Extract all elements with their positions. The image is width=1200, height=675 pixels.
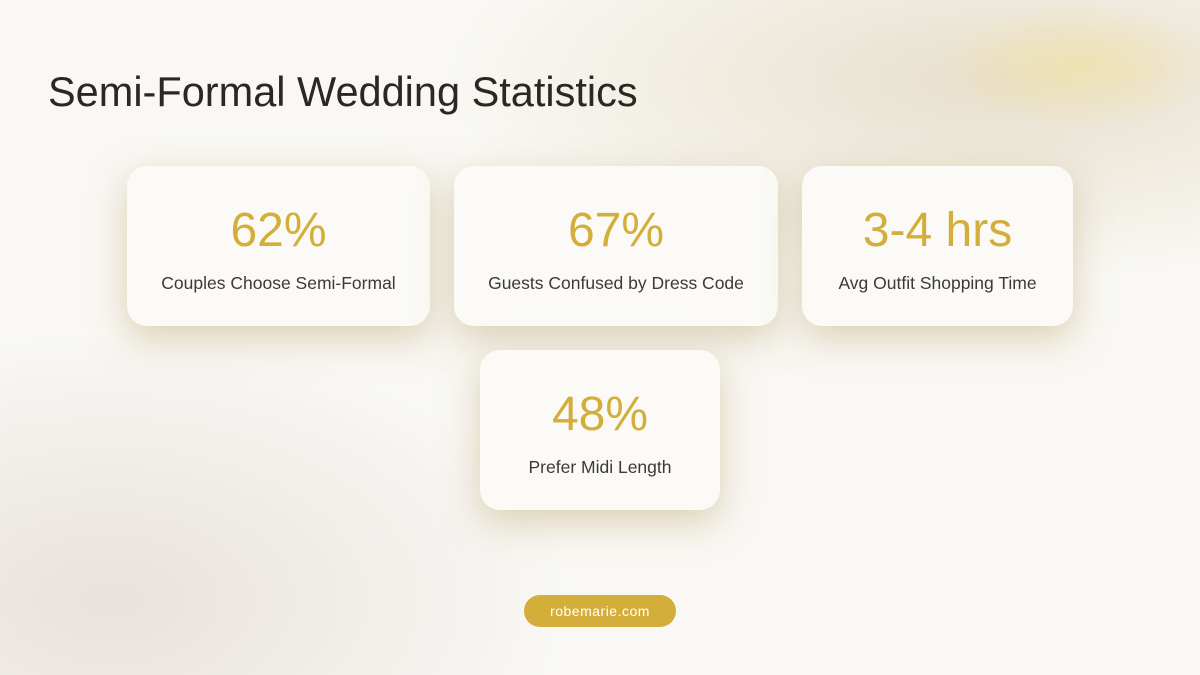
stat label: Prefer Midi Length [528, 457, 672, 477]
card: couples semi-formal [127, 166, 430, 326]
stat label: Avg Outfit Shopping Time [838, 273, 1037, 293]
footer pill: website: robemarie.com [550, 603, 650, 619]
stat label: Guests Confused by Dress Code [488, 273, 744, 293]
footer pill: website [524, 595, 676, 627]
stat number: 3-4 hrs [863, 204, 1012, 257]
title: Semi-Formal Wedding Statistics [48, 68, 638, 115]
stat number: 48% [552, 388, 648, 441]
stat number: 62% [230, 204, 327, 257]
card: midi length [480, 350, 720, 510]
card: guests confused [454, 166, 778, 326]
stat label: Couples Choose Semi-Formal [161, 273, 396, 293]
stat number: 67% [568, 204, 664, 257]
card: shopping time [802, 166, 1073, 326]
